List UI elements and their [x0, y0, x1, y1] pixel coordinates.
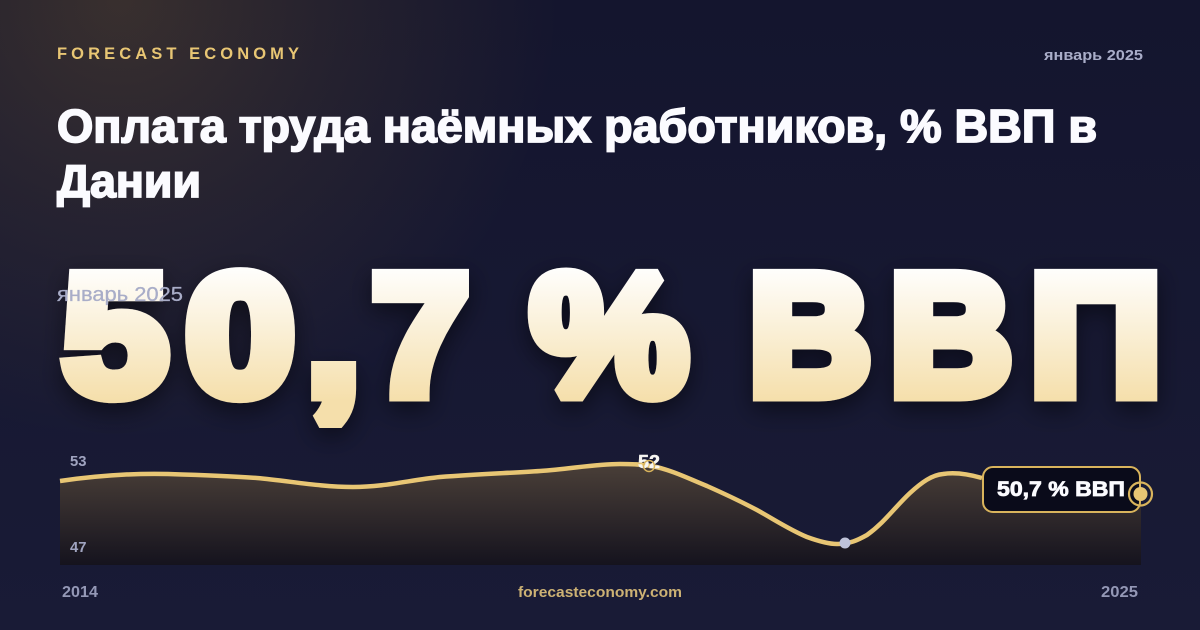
big value: В — [890, 240, 1012, 431]
big value: % — [531, 239, 688, 430]
current value callout: 50,7 % ВВП — [997, 478, 1125, 501]
date top right: январь 2025 — [1044, 47, 1143, 64]
big value — [63, 239, 1162, 431]
current value marker — [1129, 482, 1152, 506]
peak value label: 52 — [638, 452, 660, 472]
y-axis max label: 53 — [70, 453, 86, 470]
overlapping date label: январь 2025 — [57, 284, 183, 306]
area fill — [60, 464, 1141, 565]
big value: 5 — [63, 240, 168, 431]
title: Дании — [57, 155, 201, 207]
peak marker — [644, 460, 654, 472]
current value callout — [983, 467, 1140, 512]
brand heading: FORECAST ECONOMY — [57, 45, 299, 63]
big value: , — [306, 240, 361, 431]
end year: 2025 — [1101, 584, 1138, 601]
title — [57, 100, 1097, 207]
big value: 0 — [186, 239, 294, 430]
source site: forecasteconomy.com — [518, 585, 682, 601]
big value: 7 — [372, 240, 469, 431]
trend line — [60, 464, 982, 544]
minimum marker — [840, 538, 850, 548]
big value: В — [749, 240, 871, 431]
area chart — [60, 452, 1152, 565]
big value: П — [1030, 239, 1162, 431]
title: Оплата труда наёмных работников, % ВВП в — [57, 100, 1097, 152]
start year: 2014 — [62, 584, 98, 601]
y-axis min label: 47 — [70, 539, 86, 556]
